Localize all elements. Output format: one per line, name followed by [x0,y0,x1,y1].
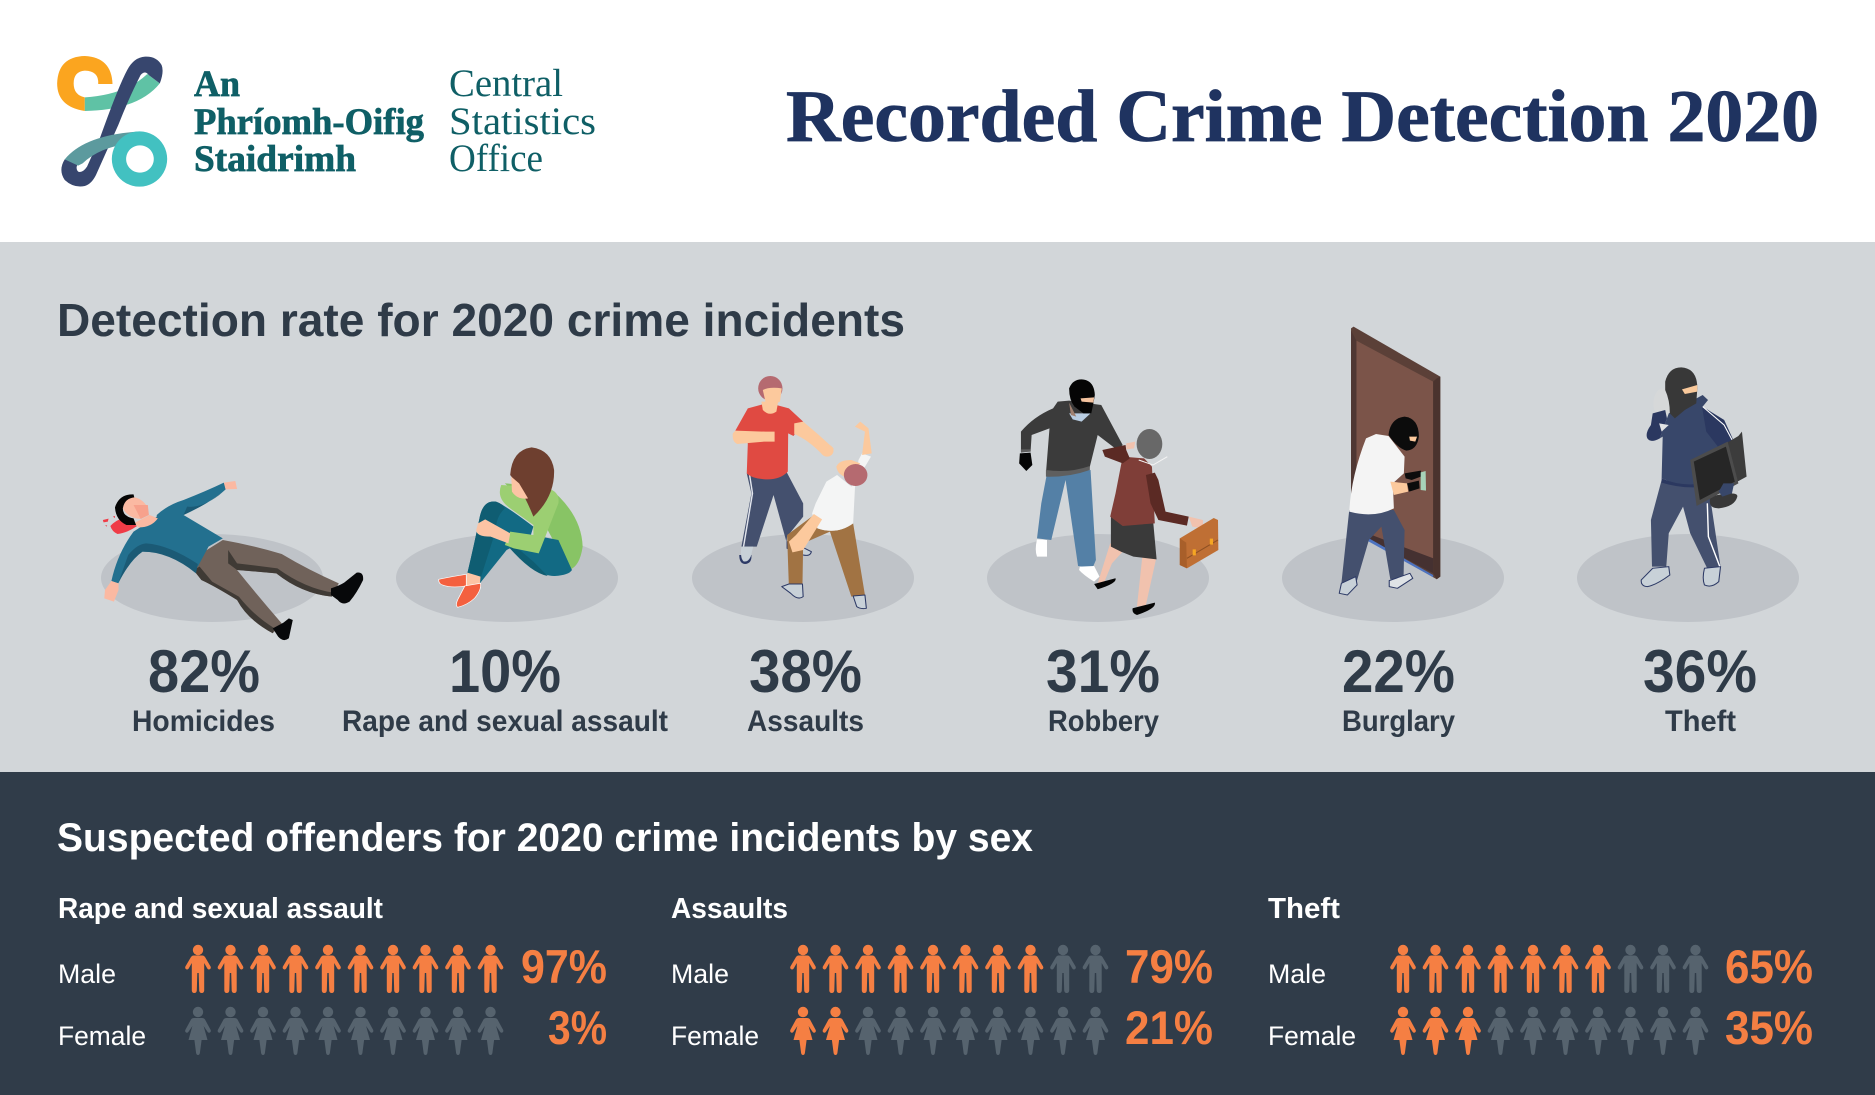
stat: burglary: Burglary [1342,705,1455,738]
stat: homicides: 82% [148,638,260,705]
panel: assaults by sex: Assaults [671,893,788,925]
logo: English name [449,62,596,180]
heading: suspected offenders: Suspected offenders for 2020 crime incidents by sex [57,816,1033,860]
stat: rape and sexual assault: 10% [449,638,561,705]
stat: burglary [1342,638,1455,738]
panel: theft by sex: Female [1268,1021,1356,1051]
panel: rape and sexual assault by sex: 3% [548,1001,607,1054]
stat: rape and sexual assault: Rape and sexual assault [342,705,668,738]
illustration: assault [733,376,872,609]
stat: assaults: Assaults [747,705,864,738]
logo: English name: Central [449,62,563,105]
illustration: robbery [1019,379,1218,615]
panel: rape and sexual assault by sex: 97% [521,940,607,993]
stat: assaults: 38% [749,638,862,705]
logo: English name: Office [449,137,543,180]
header background [0,0,1875,242]
detection rate panel background [0,242,1875,772]
logo: CSO symbol [57,56,167,187]
panel: theft by sex [1268,893,1813,1055]
panel: rape and sexual assault by sex: Male [58,959,116,989]
stat: robbery: Robbery [1048,705,1159,738]
stat: homicides [132,638,275,738]
logo: Irish name: Staidrimh [194,139,356,180]
panel: theft by sex: Theft [1268,893,1340,925]
illustration: sitting woman [439,447,583,607]
ground ellipses [101,534,1799,622]
panel: theft by sex: 65% [1725,940,1813,993]
stat: robbery: 31% [1046,638,1160,705]
illustration: theft [1641,367,1747,587]
stat: theft: 36% [1643,638,1757,705]
panel: assaults by sex: Female [671,1021,759,1051]
title: Recorded Crime Detection 2020 [786,76,1819,158]
heading: detection rate: Detection rate for 2020 crime incidents [57,294,905,346]
logo: English name: Statistics [449,100,596,143]
panel: theft by sex: 35% [1725,1001,1813,1054]
stat: homicides: Homicides [132,705,275,738]
offenders panel background [0,772,1875,1095]
panel: rape and sexual assault by sex: Rape and sexual assault [58,893,383,925]
panel: assaults by sex: Male [671,959,729,989]
stat: robbery [1046,638,1160,738]
illustration: burglary [1339,327,1440,595]
panel: theft by sex: Male [1268,959,1326,989]
stat: theft [1643,638,1757,738]
stat: theft: Theft [1665,705,1736,738]
logo: Irish name: An [194,64,240,105]
panel: rape and sexual assault by sex [58,893,607,1055]
panel: assaults by sex: 21% [1125,1001,1213,1054]
stat: rape and sexual assault [342,638,668,738]
logo: Irish name [194,64,424,180]
logo: Irish name: Phríomh-Oifig [194,102,424,143]
illustration: homicide victim [103,481,363,640]
stat: assaults [747,638,864,738]
panel: assaults by sex [671,893,1213,1055]
panel: assaults by sex: 79% [1125,940,1213,993]
stat: burglary: 22% [1342,638,1455,705]
panel: rape and sexual assault by sex: Female [58,1021,146,1051]
